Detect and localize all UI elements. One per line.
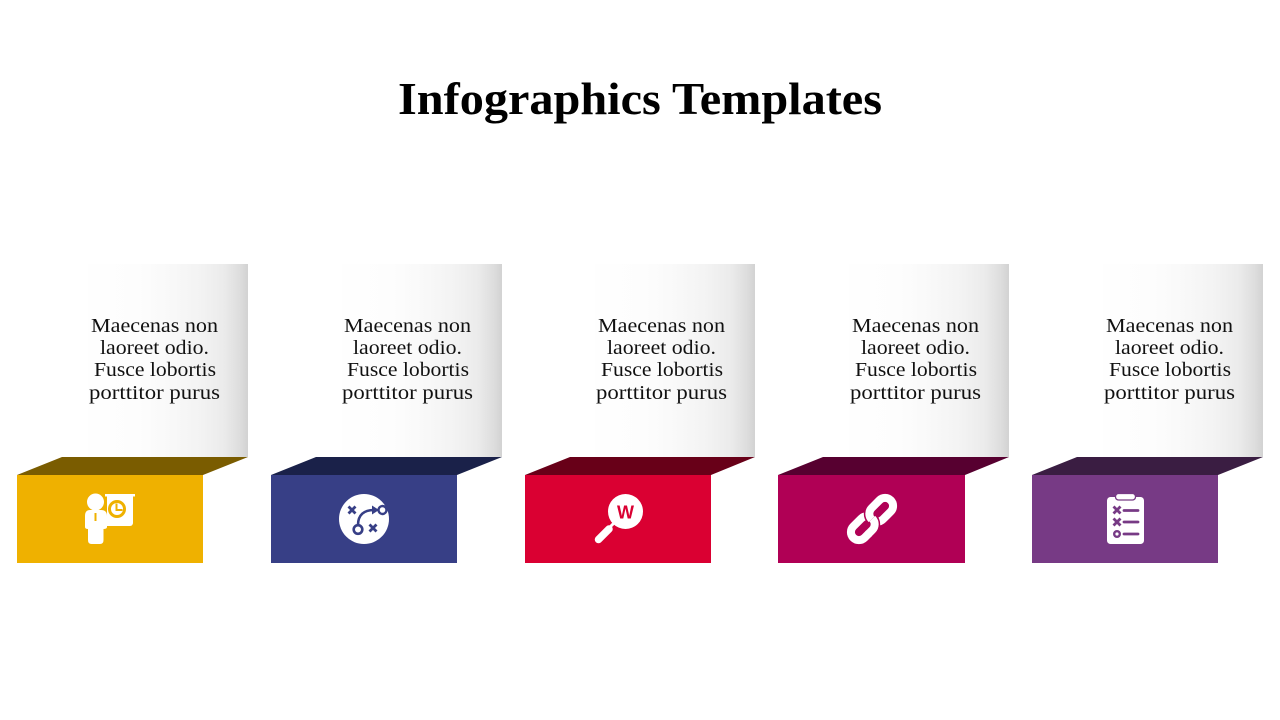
icon: magnifier with W: [598, 494, 643, 540]
text block: Maecenas non: [1106, 315, 1233, 337]
text block: porttitor purus: [1104, 382, 1235, 404]
paper backdrop: [595, 264, 755, 457]
color box: [778, 475, 965, 563]
fold top: [271, 457, 502, 475]
text block: [850, 315, 981, 404]
text block: [89, 315, 220, 404]
color box: [525, 475, 711, 563]
text block: laoreet odio.: [861, 337, 970, 359]
text block: Fusce lobortis: [94, 359, 216, 381]
fold top: [525, 457, 755, 475]
text block: laoreet odio.: [100, 337, 209, 359]
text block: porttitor purus: [342, 382, 473, 404]
text block: laoreet odio.: [607, 337, 716, 359]
icon: presenter with chart: [85, 492, 135, 544]
text block: porttitor purus: [89, 382, 220, 404]
paper backdrop: [1103, 264, 1263, 457]
color box: [271, 475, 457, 563]
fold top: [17, 457, 248, 475]
paper backdrop: [849, 264, 1009, 457]
icon: checklist clipboard: [1107, 494, 1144, 544]
color box: [1032, 475, 1218, 563]
text block: Fusce lobortis: [1109, 359, 1231, 381]
text block: porttitor purus: [596, 382, 727, 404]
fold top: [778, 457, 1009, 475]
paper backdrop: [88, 264, 248, 457]
text block: laoreet odio.: [353, 337, 462, 359]
text block: Maecenas non: [91, 315, 218, 337]
icon: chain link: [848, 495, 896, 543]
icon: strategy play: [339, 494, 389, 544]
fold top: [1032, 457, 1263, 475]
text block: [1104, 315, 1235, 404]
text block: [342, 315, 473, 404]
text block: Maecenas non: [344, 315, 471, 337]
text block: porttitor purus: [850, 382, 981, 404]
title: Infographics Templates: [398, 73, 882, 124]
panel: step 5: [1032, 264, 1263, 563]
text block: Fusce lobortis: [855, 359, 977, 381]
text block: [596, 315, 727, 404]
panel: step 4: [778, 264, 1009, 563]
panel: step 1: [17, 264, 248, 563]
panel: step 3: [525, 264, 755, 563]
text block: Fusce lobortis: [347, 359, 469, 381]
color box: [17, 475, 203, 563]
icon: magnifier with W: W: [617, 502, 634, 522]
text block: Maecenas non: [598, 315, 725, 337]
text block: Fusce lobortis: [601, 359, 723, 381]
text block: laoreet odio.: [1115, 337, 1224, 359]
panel: step 2: [271, 264, 502, 563]
paper backdrop: [342, 264, 502, 457]
text block: Maecenas non: [852, 315, 979, 337]
